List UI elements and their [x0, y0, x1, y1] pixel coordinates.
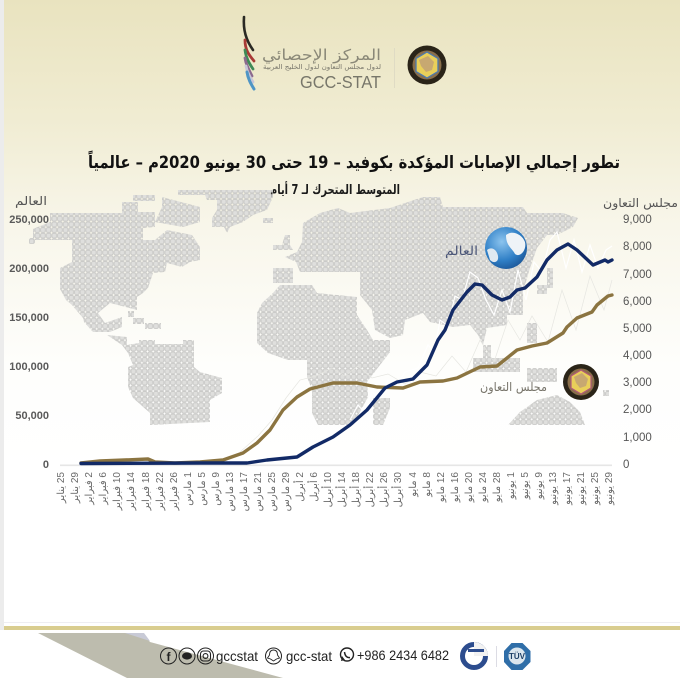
x axis date labels: 22 فبراير: [155, 472, 166, 511]
title: تطور إجمالي الإصابات المؤكدة بكوفيد – 19 حتى 30 يونيو 2020م – عالمياً: [88, 149, 620, 173]
line chart: daily faint traces: [240, 232, 612, 452]
x axis line: [60, 464, 612, 466]
x axis date labels: 25 يناير: [56, 472, 67, 504]
icon: TUV badge: [504, 643, 530, 670]
logo subtitle: لدول مجلس التعاون لدول الخليج العربية: [263, 63, 381, 71]
x axis date labels: 8 مايو: [422, 472, 433, 498]
phone number: +986 2434 6482: [357, 647, 449, 663]
handle: gcc-stat: gcc-stat: [286, 648, 332, 664]
x axis date labels: 5 مارس: [197, 472, 208, 506]
x axis date labels: 26 فبراير: [169, 472, 180, 511]
icon: snapchat: [266, 648, 282, 664]
right axis labels: GCC: 3,000: [623, 377, 652, 389]
x axis date labels: 18 أبريل: [349, 472, 362, 507]
right axis labels: GCC: 1,000: [623, 432, 652, 444]
x axis date labels: 6 فبراير: [98, 472, 109, 506]
x axis date labels: 6 أبريل: [307, 472, 320, 502]
subtitle: المتوسط المتحرك لـ 7 أيام: [270, 181, 400, 198]
line chart: GCC moving average: [81, 295, 612, 463]
x axis date labels: 25 يونيو: [590, 472, 601, 506]
right axis labels: GCC: 9,000: [623, 214, 652, 226]
left axis title: العالم: [15, 194, 47, 208]
x axis date labels: 29 يونيو: [604, 472, 615, 506]
x axis date labels: 21 مارس: [253, 472, 264, 511]
icon: facebook: [160, 648, 176, 664]
left axis labels: world: 0: [43, 459, 49, 471]
x axis date labels: 13 يونيو: [548, 472, 559, 506]
x axis date labels: 29 مارس: [281, 472, 292, 511]
x axis date labels: 21 يونيو: [576, 472, 587, 506]
x axis date labels: 10 فبراير: [112, 472, 123, 511]
x axis date labels: [56, 472, 615, 511]
left axis labels: world: 50,000: [15, 410, 49, 422]
left axis labels: world: 250,000: [9, 214, 49, 226]
icon: facebook: f: [166, 650, 172, 664]
left axis labels: world: 100,000: [9, 361, 49, 373]
icon: GCC emblem: [408, 46, 446, 84]
icon: globe: [485, 227, 527, 269]
footer wing shape: [38, 633, 283, 678]
x axis date labels: 26 أبريل: [377, 472, 390, 507]
x axis date labels: 12 مايو: [436, 472, 447, 503]
x axis date labels: 14 أبريل: [335, 472, 348, 507]
x axis date labels: 18 فبراير: [141, 472, 152, 511]
x axis date labels: 24 مايو: [478, 472, 489, 503]
dotted world map: [29, 190, 609, 425]
right axis labels: GCC: 2,000: [623, 404, 652, 416]
x axis date labels: 30 أبريل: [391, 472, 404, 507]
icon: ribbon staff: [244, 17, 254, 89]
icon: whatsapp: [340, 648, 354, 661]
x axis date labels: 22 أبريل: [363, 472, 376, 507]
left axis labels: world: [9, 214, 49, 471]
x axis date labels: 9 يونيو: [534, 472, 545, 500]
right axis labels: GCC: 6,000: [623, 296, 652, 308]
x axis date labels: 2 فبراير: [84, 472, 95, 506]
x axis date labels: 1 مارس: [183, 472, 194, 506]
right axis labels: GCC: 0: [623, 459, 629, 471]
right axis labels: GCC: 5,000: [623, 323, 652, 335]
x axis date labels: 5 يونيو: [520, 472, 531, 500]
x axis date labels: 25 مارس: [267, 472, 278, 511]
right axis labels: GCC: 4,000: [623, 350, 652, 362]
right axis labels: GCC: 7,000: [623, 269, 652, 281]
x axis date labels: 1 يونيو: [506, 472, 517, 500]
line chart: world moving average: [81, 244, 612, 464]
x axis date labels: 28 مايو: [492, 472, 503, 503]
right axis title: مجلس التعاون: [603, 196, 678, 211]
icon: twitter: [179, 648, 195, 664]
icon: instagram: [198, 648, 214, 664]
x axis date labels: 16 مايو: [450, 472, 461, 503]
x axis date labels: 29 يناير: [70, 472, 81, 504]
footer: [4, 622, 680, 678]
logo wordmark: GCC-STAT: [300, 72, 381, 92]
x axis date labels: 2 أبريل: [293, 472, 306, 502]
left axis labels: world: 150,000: [9, 312, 49, 324]
x axis date labels: 13 مارس: [225, 472, 236, 511]
x axis date labels: 20 مايو: [464, 472, 475, 503]
x axis date labels: 10 أبريل: [321, 472, 334, 507]
handle: gccstat: gccstat: [216, 648, 258, 664]
x axis date labels: 9 مارس: [211, 472, 222, 506]
x axis date labels: 14 فبراير: [126, 472, 137, 511]
left axis labels: world: 200,000: [9, 263, 49, 275]
world label: العالم: [445, 243, 478, 259]
right axis labels: GCC: [623, 214, 652, 471]
icon: ISO badge: [462, 642, 488, 668]
callout: GCC: [480, 364, 599, 400]
icon: GCC emblem: [563, 364, 599, 400]
icon: TUV badge: TÜV: [509, 652, 526, 661]
gold rule: [4, 626, 680, 630]
callout: world: [445, 227, 527, 269]
x axis date labels: 17 مارس: [239, 472, 250, 511]
logo title: المركز الإحصائي: [262, 46, 381, 65]
right axis labels: GCC: 8,000: [623, 241, 652, 253]
x axis date labels: 17 يونيو: [562, 472, 573, 506]
GCC label: مجلس التعاون: [480, 380, 547, 395]
x axis date labels: 4 مايو: [408, 472, 419, 498]
logo: GCC-STAT: [244, 17, 446, 92]
